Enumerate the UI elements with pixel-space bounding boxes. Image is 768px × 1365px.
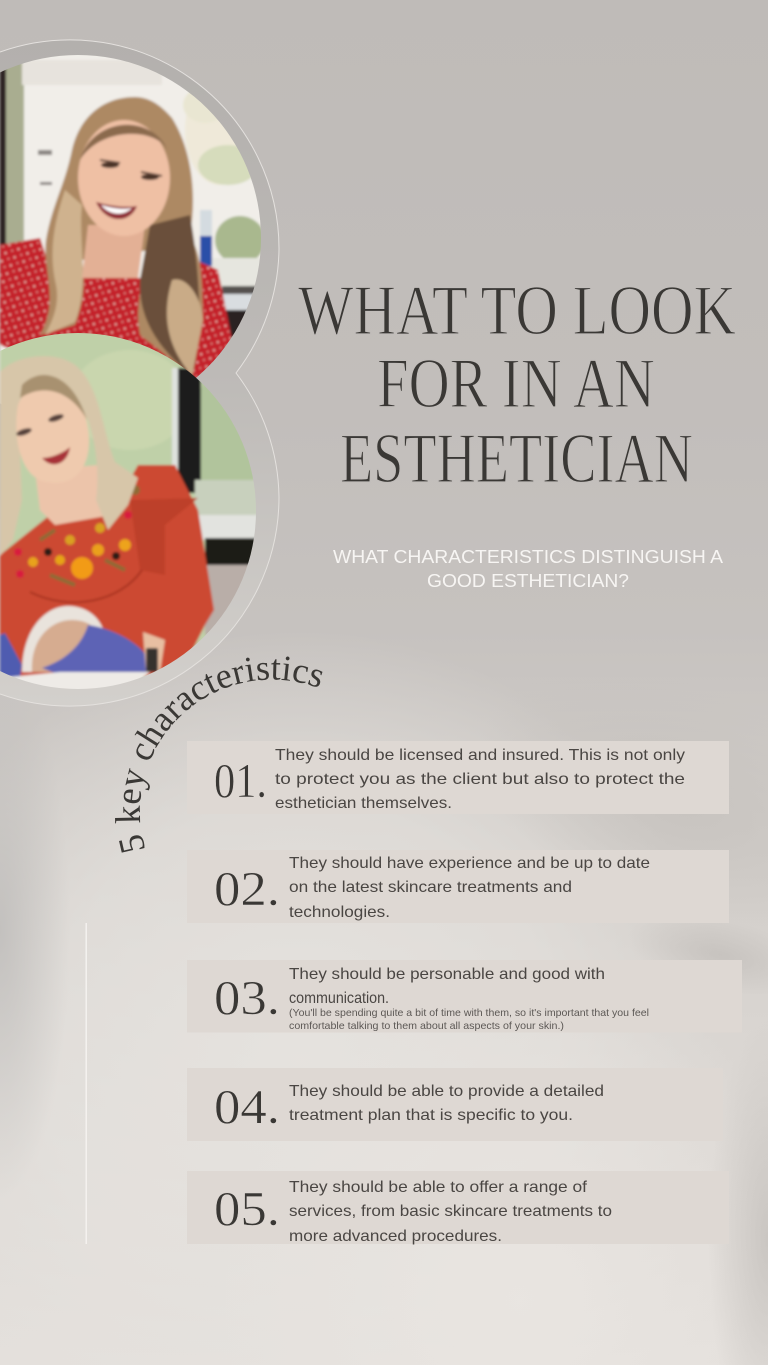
neck (35, 465, 112, 525)
item 05: 05. (214, 1181, 280, 1236)
subtitle: GOOD ESTHETICIAN? (427, 571, 629, 591)
towel (8, 670, 152, 689)
item 04: They should be able to provide a detailed (289, 1083, 604, 1100)
item 02: on the latest skincare treatments and (289, 879, 572, 896)
item 01: to protect you as the client but also to protect the (275, 771, 685, 788)
item 05: more advanced procedures. (289, 1228, 502, 1245)
gloves (42, 625, 146, 675)
blouse (0, 238, 232, 385)
item 03: 03. (214, 970, 280, 1025)
neck and chest (82, 225, 145, 278)
item 01 (187, 741, 729, 814)
photo: smiling esthetician in red dotted blouse (0, 55, 261, 404)
item 04: 04. (214, 1079, 280, 1134)
item 05: They should be able to offer a range of (289, 1179, 588, 1196)
item 04 (187, 1068, 723, 1141)
item 04: treatment plan that is specific to you. (289, 1107, 573, 1124)
wrist and watch (143, 632, 165, 672)
face (78, 120, 170, 236)
hair (0, 356, 138, 556)
client headband and face (22, 606, 105, 672)
item 02: technologies. (289, 904, 390, 921)
item 01: 01. (214, 753, 267, 808)
item 01: esthetician themselves. (275, 795, 452, 812)
subtitle (333, 547, 723, 591)
title: FOR IN AN (377, 345, 655, 423)
item 02 (187, 850, 729, 923)
item 03: They should be personable and good with (289, 966, 605, 983)
dress (0, 465, 214, 690)
item 03: comfortable talking to them about all aspects of your skin.) (289, 1020, 564, 1032)
embroidery (14, 485, 140, 585)
item 05 (187, 1171, 729, 1245)
item 03 (187, 960, 742, 1032)
item 05: services, from basic skincare treatments to (289, 1203, 612, 1220)
item 03: (You'll be spending quite a bit of time with them, so it's important that you feel (289, 1007, 649, 1019)
item 03: communication. (289, 990, 389, 1007)
item 01: They should be licensed and insured. This is not only (275, 747, 685, 764)
title (298, 272, 736, 498)
subtitle: WHAT CHARACTERISTICS DISTINGUISH A (333, 547, 723, 567)
photo: esthetician in orange embroidered dress treating a client (0, 330, 270, 695)
item 02: 02. (214, 861, 280, 916)
curved heading: 5 key characteristics (115, 656, 322, 853)
vertical divider line (86, 923, 87, 1244)
hair (40, 97, 203, 376)
decorative figure-eight frame behind photos (0, 40, 279, 706)
item 02: They should have experience and be up to date (289, 855, 650, 872)
